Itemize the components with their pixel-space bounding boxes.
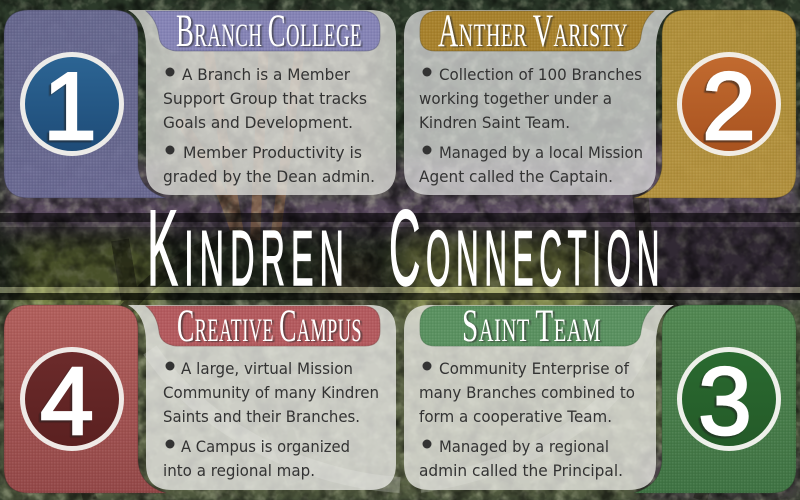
number circle 1	[22, 53, 122, 160]
body text 4	[163, 359, 379, 480]
number circle 4: 4	[40, 348, 94, 455]
body text 3	[419, 359, 635, 480]
body text 2: working together under a	[419, 89, 612, 108]
header ribbon 2	[420, 11, 654, 51]
panel 4: Creative Campus	[4, 300, 396, 493]
body text 4: A large, virtual Mission	[181, 359, 353, 378]
header ribbon 3	[420, 306, 654, 346]
body text 1: Member Productivity is	[183, 143, 362, 162]
body text 3: Community Enterprise of	[439, 359, 629, 378]
body text 2: Collection of 100 Branches	[439, 65, 642, 84]
body text 2: Agent called the Captain.	[419, 167, 613, 186]
header ribbon 1	[146, 11, 380, 51]
number circle 3	[680, 348, 778, 455]
body text 1: graded by the Dean admin.	[163, 167, 375, 186]
text card 1	[128, 10, 396, 195]
heading 1: BRANCH COLLEGE	[176, 5, 362, 57]
body text 4: into a regional map.	[163, 461, 315, 480]
body text 3: admin called the Principal.	[419, 461, 623, 480]
colored tab 4	[4, 305, 166, 493]
panel 2: Anther Varisty	[404, 5, 796, 198]
header ribbon 4	[146, 306, 380, 346]
text card 4	[128, 305, 396, 490]
body text 2	[419, 65, 643, 186]
body text 2: Kindren Saint Team.	[419, 113, 570, 132]
panel 3: Saint Team	[404, 300, 796, 493]
heading 3: SAINT TEAM	[462, 300, 601, 352]
heading 4: CREATIVE CAMPUS	[177, 300, 362, 352]
body text 4: Saints and their Branches.	[163, 407, 360, 426]
text card 2	[404, 10, 674, 195]
number circle 1: 1	[43, 53, 97, 160]
body text 1: A Branch is a Member	[182, 65, 350, 84]
body text 1	[163, 65, 375, 186]
text card 3	[404, 305, 674, 490]
body text 2: Managed by a local Mission	[439, 143, 643, 162]
body text 3: Managed by a regional	[439, 437, 609, 456]
heading 2: ANTHER VARISTY	[438, 5, 628, 57]
body text 1: Goals and Development.	[163, 113, 353, 132]
panel 1: Branch College	[4, 5, 396, 198]
number circle 3: 3	[698, 348, 752, 455]
title: KINDREN	[147, 187, 350, 308]
number circle 2: 2	[702, 53, 756, 160]
title band: dark stripes	[0, 213, 800, 300]
colored tab 3	[634, 305, 796, 493]
body text 3: form a cooperative Team.	[419, 407, 612, 426]
number circle 2	[680, 53, 778, 160]
colored tab 2	[634, 10, 796, 198]
body text 4: A Campus is organized	[181, 437, 350, 456]
colored tab 1	[4, 10, 166, 198]
body text 4: Community of many Kindren	[163, 383, 379, 402]
number circle 4	[22, 348, 122, 455]
faint arcs behind panels	[150, 320, 650, 485]
body text 1: Support Group that tracks	[163, 89, 367, 108]
body text 3: many Branches combined to	[419, 383, 635, 402]
